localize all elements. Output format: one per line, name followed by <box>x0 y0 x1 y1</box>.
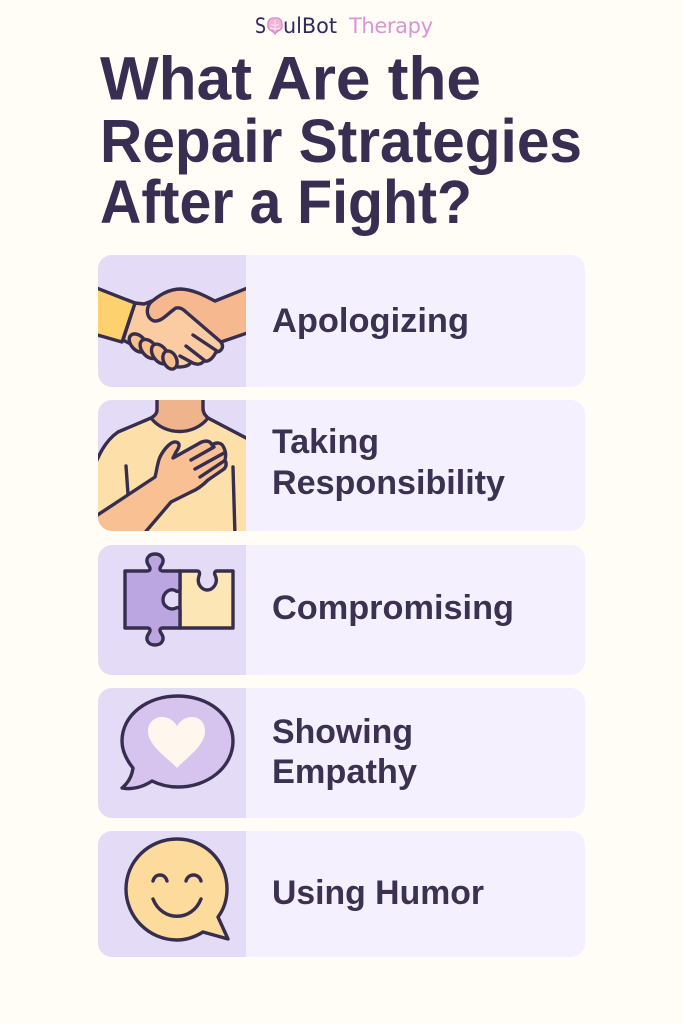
panel: Showing Empathy <box>98 688 585 818</box>
logo: SoulBot Therapy <box>255 14 433 38</box>
label: Using Humor: Using Humor <box>272 874 484 912</box>
logo: SoulBot Therapy: S <box>255 14 266 38</box>
title: Repair Strategies <box>100 107 582 175</box>
panel: Compromising <box>98 545 585 675</box>
label: Showing Empathy <box>272 713 417 791</box>
logo: SoulBot Therapy: ulBot <box>283 14 337 38</box>
icon: speech bubble with heart <box>122 696 233 789</box>
icon: hand on chest <box>98 400 246 531</box>
label: Taking Responsibility: Taking <box>272 423 379 461</box>
title: What Are the <box>100 44 481 112</box>
logo: SoulBot Therapy: Therapy <box>348 14 433 38</box>
panel: Using Humor <box>98 831 585 957</box>
title <box>100 44 582 236</box>
icon: puzzle pieces <box>125 554 233 645</box>
label: Showing Empathy: Showing <box>272 713 413 751</box>
label: Showing Empathy: Empathy <box>272 753 417 791</box>
label: Compromising: Compromising <box>272 589 514 627</box>
icon: handshake <box>94 287 250 371</box>
label: Apologizing: Apologizing <box>272 302 469 340</box>
panel: Apologizing <box>94 255 585 387</box>
label: Taking Responsibility <box>272 423 505 502</box>
panel: Taking Responsibility <box>90 396 585 536</box>
logo: SoulBot Therapy: o <box>269 14 281 38</box>
title: After a Fight? <box>100 168 472 236</box>
label: Taking Responsibility: Responsibility <box>272 464 505 502</box>
icon: smiling speech bubble <box>126 839 228 940</box>
